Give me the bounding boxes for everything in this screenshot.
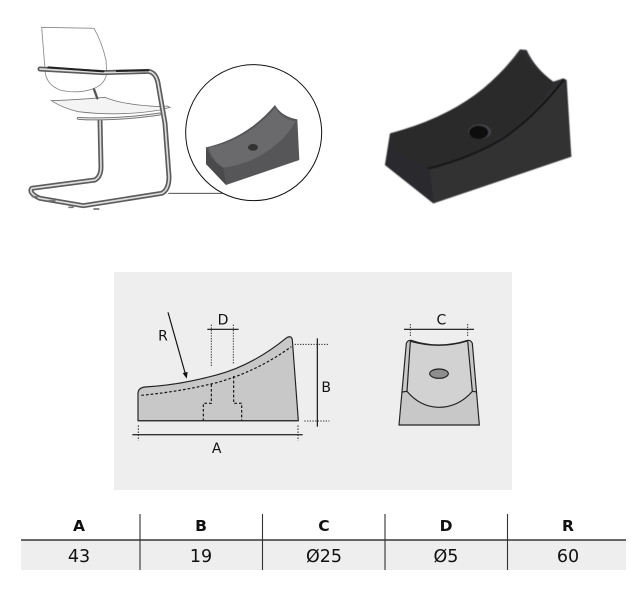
drawing: side view: [132, 312, 331, 457]
foot pad in circle: [206, 105, 299, 185]
photo: black foot pad: [385, 49, 571, 203]
table value row: Ø25: [306, 547, 342, 567]
dimension C: C: [436, 313, 446, 329]
table value row: 43: [68, 547, 90, 567]
table value row: [68, 547, 579, 567]
radius arrow R: [168, 312, 188, 379]
callout leader line: [168, 192, 223, 195]
table header row: B: [195, 517, 207, 535]
chair frame: [31, 67, 169, 206]
table header row: R: [562, 517, 574, 535]
drawing: end view: [399, 313, 479, 425]
table: dimensions: [21, 514, 626, 570]
table header row: A: [73, 517, 85, 535]
pad curved top surface: [391, 51, 554, 168]
table header row: D: [440, 517, 453, 535]
pad front left face: [385, 134, 433, 203]
table value row: Ø5: [434, 547, 458, 567]
dimension D: D: [218, 313, 228, 329]
side profile: [138, 337, 298, 421]
dimension B: B: [321, 380, 331, 396]
label R: R: [158, 329, 168, 345]
dimension B: [295, 338, 331, 427]
inner saddle surface: [407, 341, 472, 407]
chair seat: [51, 97, 170, 114]
dimension D: [207, 313, 239, 367]
chair feet: [32, 197, 99, 209]
chair backrest: [42, 27, 107, 92]
pad hole: [468, 124, 491, 139]
end profile: [399, 340, 479, 425]
table header row: [73, 517, 574, 535]
table value row background: [21, 540, 626, 570]
illustration: chair with zoom callout: [31, 27, 322, 209]
hole: [430, 369, 448, 378]
panel: technical drawing background: [114, 272, 512, 490]
pad side face shading: [430, 79, 571, 203]
table value row: 60: [557, 547, 579, 567]
callout circle: [186, 65, 322, 201]
table header row: C: [318, 517, 330, 535]
dimension A: [132, 425, 303, 457]
dimension A: A: [212, 441, 222, 457]
pad body: [385, 49, 571, 203]
table value row: 19: [190, 547, 212, 567]
hidden lines: [141, 347, 291, 421]
